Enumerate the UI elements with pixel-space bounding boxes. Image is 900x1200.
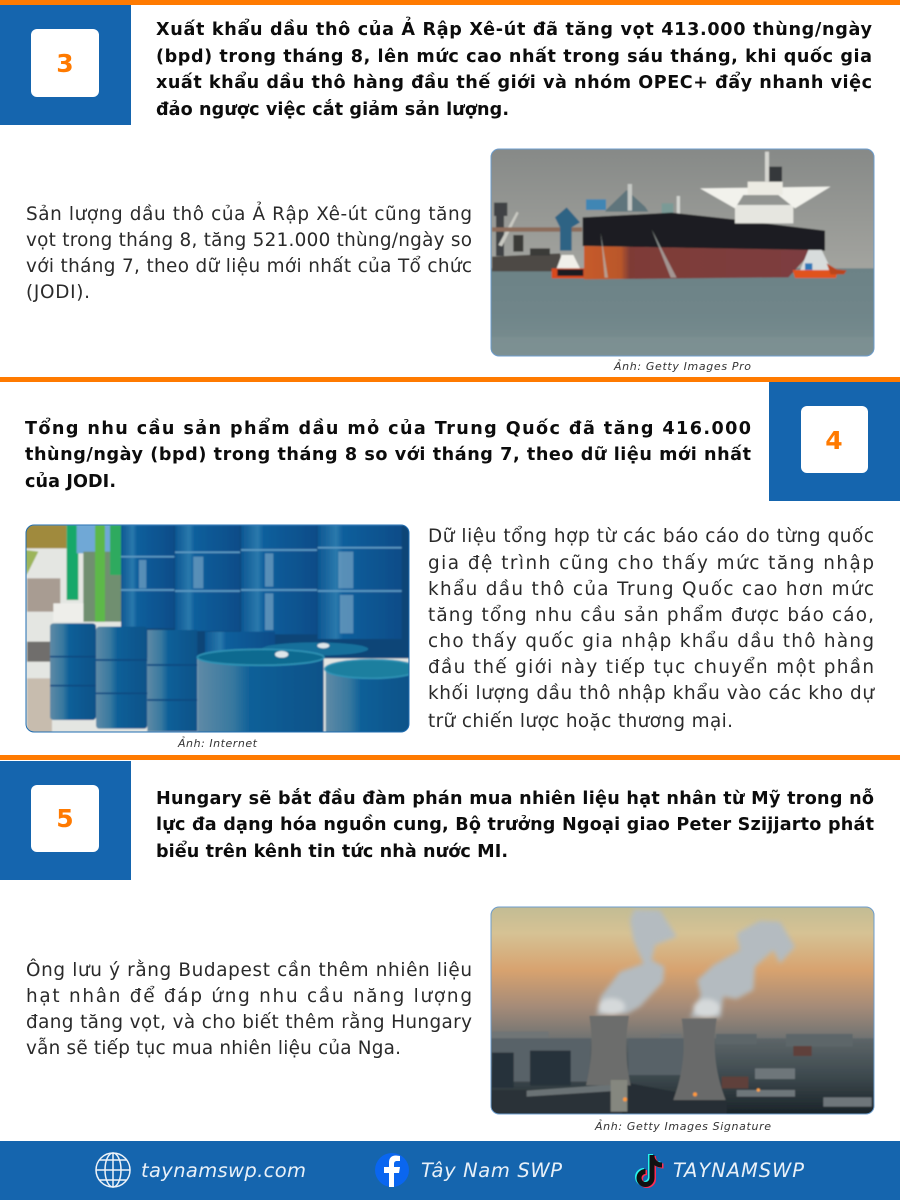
number badge 5 xyxy=(0,761,131,880)
Facebook page name: Tây Nam SWP xyxy=(421,1159,562,1182)
body text: item 4: khẩu dầu thô của Trung Quốc cao hơn mức xyxy=(428,579,874,600)
photo: stacked blue oil barrels xyxy=(25,525,418,733)
caption: photo credit Internet: Ảnh: Internet xyxy=(177,736,258,750)
footer bar with contact links xyxy=(0,1141,900,1200)
number badge 4 xyxy=(769,382,900,501)
heading: item 3: đảo ngược việc cắt giảm sản lượng. xyxy=(156,99,509,120)
heading: item 5: biểu trên kênh tin tức nhà nước MI. xyxy=(156,840,508,862)
icon: Facebook xyxy=(375,1153,409,1187)
body text: item 5: đang tăng vọt, và cho biết thêm rằng Hungary xyxy=(26,1012,472,1033)
body text: item 4: gia đệ trình cũng cho thấy mức tăng nhập xyxy=(428,553,874,574)
body text: item 3: với tháng 7, theo dữ liệu mới nhất của Tổ chức xyxy=(26,256,472,277)
icon: TikTok xyxy=(638,1154,664,1186)
body text: item 3 xyxy=(26,202,472,303)
caption: photo credit Getty Images Signature: Ảnh: Getty Images Signature xyxy=(594,1119,771,1133)
body text: item 4: khối lượng dầu thô nhập khẩu vào các kho dự xyxy=(428,683,875,704)
icon: globe xyxy=(96,1153,130,1187)
panel: item 3 Saudi crude exports xyxy=(0,5,875,373)
photo: nuclear cooling towers at dusk xyxy=(490,907,875,1117)
heading: item 4: Tổng nhu cầu sản phẩm dầu mỏ của Trung Quốc đã tăng 416.000 xyxy=(25,417,751,439)
heading: item 3 xyxy=(156,17,873,120)
heading: item 3: Xuất khẩu dầu thô của Ả Rập Xê-út đã tăng vọt 413.000 thùng/ngày xyxy=(156,17,873,40)
body text: item 4: Dữ liệu tổng hợp từ các báo cáo do từng quốc xyxy=(428,526,874,547)
panel: item 5 Hungary nuclear fuel xyxy=(0,761,875,1133)
website link: taynamswp.com xyxy=(141,1159,306,1182)
TikTok account name: TAYNAMSWP xyxy=(673,1159,804,1182)
body text: item 5 xyxy=(26,959,472,1059)
number badge 4: 4 xyxy=(825,426,843,455)
body text: item 5: hạt nhân để đáp ứng nhu cầu năng lượng xyxy=(26,986,472,1007)
heading: item 5 xyxy=(156,787,874,862)
heading: item 5: Hungary sẽ bắt đầu đàm phán mua nhiên liệu hạt nhân từ Mỹ trong nỗ xyxy=(156,787,874,809)
number badge 3: 3 xyxy=(56,49,74,78)
body text: item 4 xyxy=(428,526,875,732)
body text: item 4: đầu thế giới này tiếp tục chuyển một phần xyxy=(428,657,874,678)
body text: item 5: vẫn sẽ tiếp tục mua nhiên liệu của Nga. xyxy=(26,1038,401,1059)
number badge 3 xyxy=(0,5,131,125)
heading: item 3: xuất khẩu dầu thô hàng đầu thế giới và nhóm OPEC+ đẩy nhanh việc xyxy=(156,71,872,93)
body text: item 4: cho thấy quốc gia nhập khẩu dầu thô hàng xyxy=(428,631,874,652)
caption: photo credit Getty Images Pro: Ảnh: Getty Images Pro xyxy=(613,359,751,373)
body text: item 3: vọt trong tháng 8, tăng 521.000 thùng/ngày so xyxy=(26,230,472,251)
heading: item 5: lực đa dạng hóa nguồn cung, Bộ trưởng Ngoại giao Peter Szijjarto phát xyxy=(156,814,874,835)
heading: item 4: thùng/ngày (bpd) trong tháng 8 so với tháng 7, theo dữ liệu mới nhất xyxy=(25,444,751,465)
panel: item 4 China oil demand xyxy=(25,382,900,750)
heading: item 4: của JODI. xyxy=(25,472,116,492)
photo: oil tanker with tugboats xyxy=(490,148,875,357)
heading: item 4 xyxy=(25,417,751,492)
body text: item 3: Sản lượng dầu thô của Ả Rập Xê-út cũng tăng xyxy=(26,202,472,225)
body text: item 3: (JODI). xyxy=(26,282,90,303)
heading: item 3: (bpd) trong tháng 8, lên mức cao nhất trong sáu tháng, khi quốc gia xyxy=(156,46,872,67)
number badge 5: 5 xyxy=(56,804,74,833)
body text: item 5: Ông lưu ý rằng Budapest cần thêm nhiên liệu xyxy=(26,959,472,981)
body text: item 4: tăng tổng nhu cầu sản phẩm được báo cáo, xyxy=(428,605,874,626)
body text: item 4: trữ chiến lược hoặc thương mại. xyxy=(428,711,733,732)
